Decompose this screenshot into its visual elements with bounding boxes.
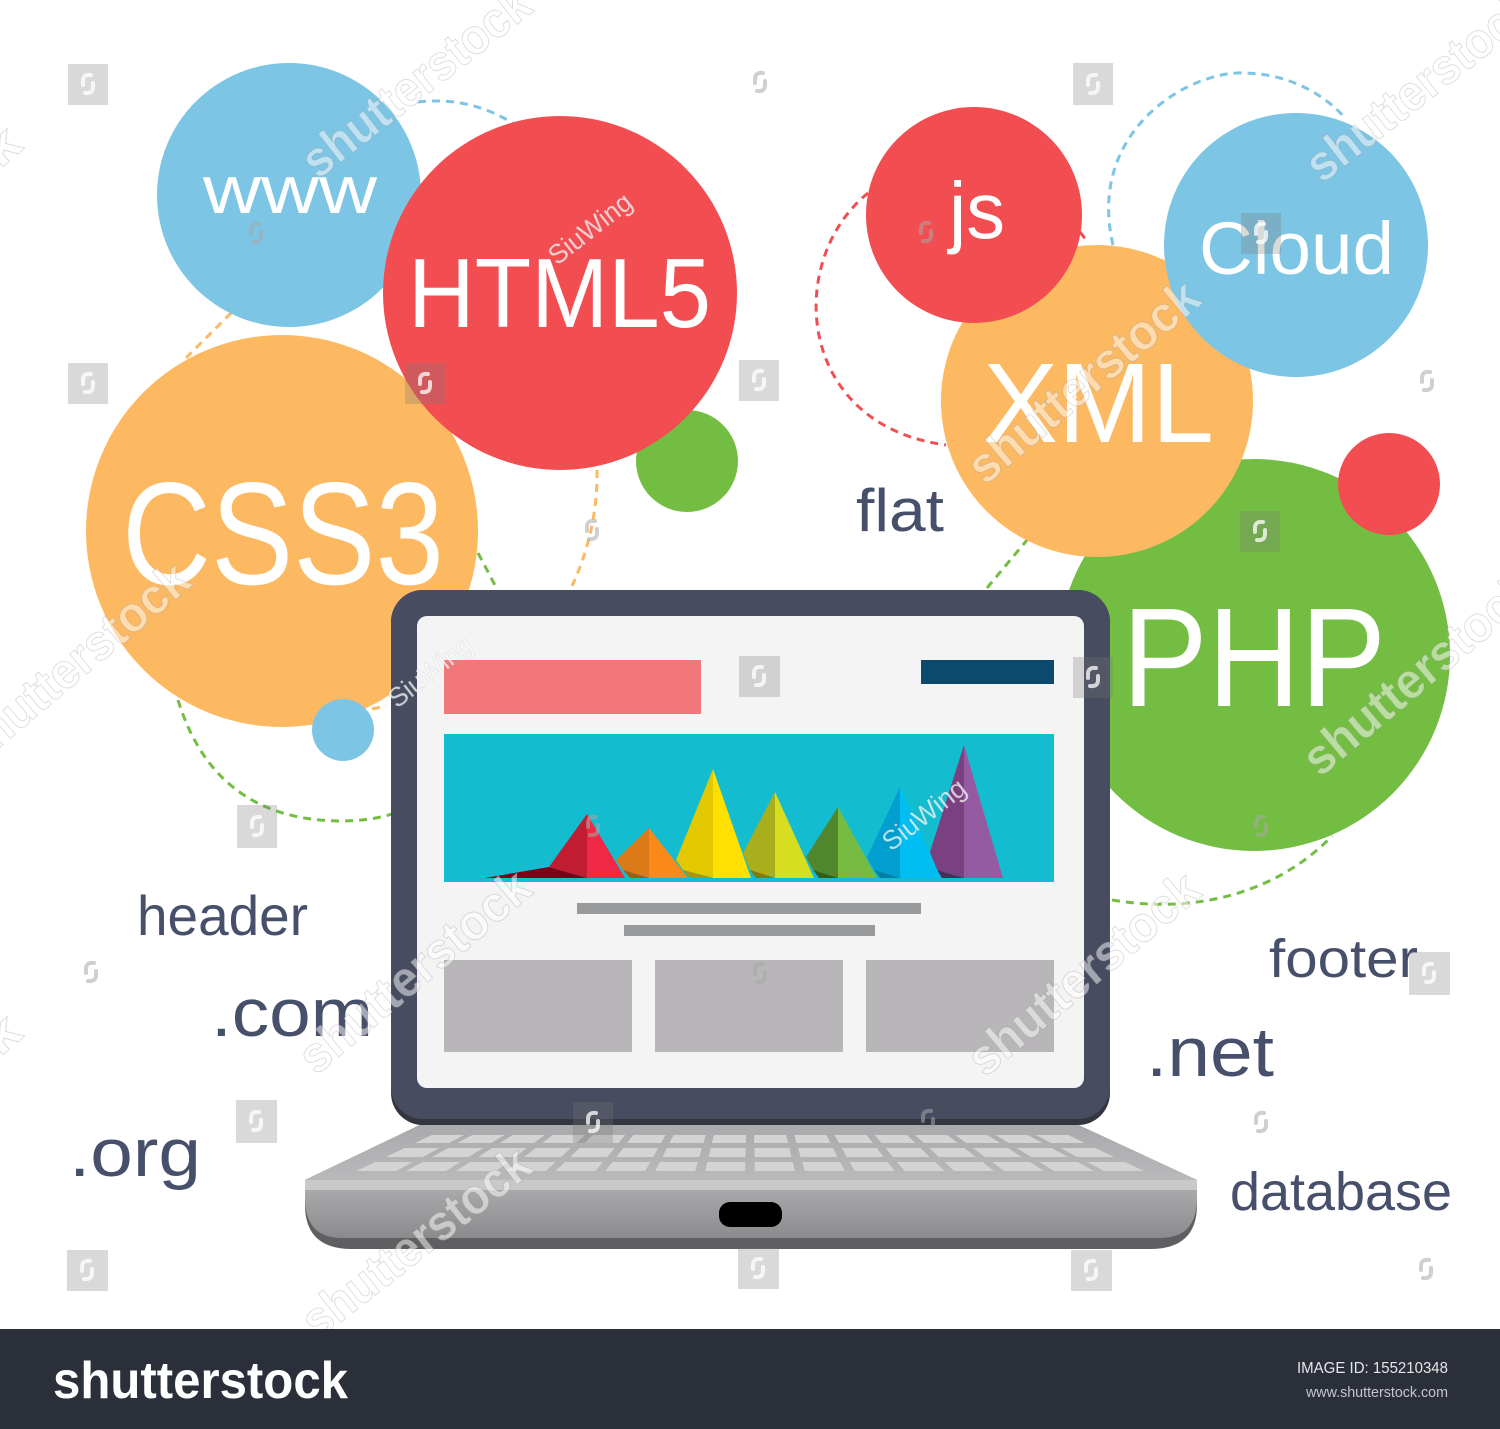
label: flat: flat [856,477,944,544]
bubble: PHP [1058,459,1450,851]
pyramid: red [485,814,625,878]
label: database: database [1230,1162,1452,1222]
site url: www.shutterstock.com [1305,1385,1448,1401]
bubble: PHP: PHP [1122,578,1386,736]
pyramid: orange [616,828,688,878]
bubble: Cloud: Cloud [1199,207,1394,290]
hero banner with pyramids [444,734,1054,882]
bubble: CSS3: CSS3 [122,452,444,615]
text placeholder lines [577,903,921,936]
bubble: Cloud [1164,113,1428,377]
laptop [305,590,1197,1249]
pyramid: olive [743,792,814,878]
label: .com: .com [211,975,373,1051]
pyramid: yellow [676,769,751,878]
site logo bar [444,660,701,714]
shutterstock logo: shutterstock [53,1352,348,1410]
SiuWing author watermarks: SiuWing [876,773,972,857]
bubble: www [157,63,421,327]
bubble: HTML5: HTML5 [408,238,711,348]
shutterstock diagonal watermarks: shutterstock [290,1135,542,1349]
dashed connector orbits [178,73,1345,904]
shutterstock diagonal watermarks: shutterstock [956,860,1211,1086]
label: .net: .net [1146,1013,1274,1091]
footer bar [0,1329,1500,1429]
laptop lid [391,590,1110,1125]
site nav button [921,660,1054,684]
SiuWing author watermarks: SiuWing [542,187,638,271]
SiuWing author watermarks: SiuWing [382,630,478,714]
bubble: XML [941,245,1253,557]
label: .org: .org [69,1115,201,1191]
pyramid: blue [867,787,941,878]
bubble: CSS3 [86,335,478,727]
bubble: XML: XML [983,340,1214,466]
SiuWing author watermarks [382,187,972,857]
laptop base [305,1122,1197,1249]
small red dot [1338,433,1440,535]
trackpad notch [719,1202,782,1227]
shutterstock diagonal watermarks: shutterstock [287,858,542,1084]
small blue dot [312,699,374,761]
bubble: HTML5 [383,116,737,470]
stock watermark squares [67,63,1450,1291]
shutterstock diagonal watermarks: shutterstock [956,268,1211,494]
content cards [444,960,1054,1052]
label: footer: footer [1269,929,1418,989]
bubble: js [866,107,1082,323]
bubble: js: js [947,166,1005,255]
pyramid: green [806,807,877,878]
pyramid: purple [930,745,1003,878]
keyword labels [69,477,1452,1222]
small green dot [636,410,738,512]
label: header: header [137,884,308,947]
keyboard keys [356,1135,1144,1171]
laptop screen [417,616,1084,1088]
image id: IMAGE ID: 155210348 [1297,1360,1448,1377]
bubble: www: www [202,152,378,228]
